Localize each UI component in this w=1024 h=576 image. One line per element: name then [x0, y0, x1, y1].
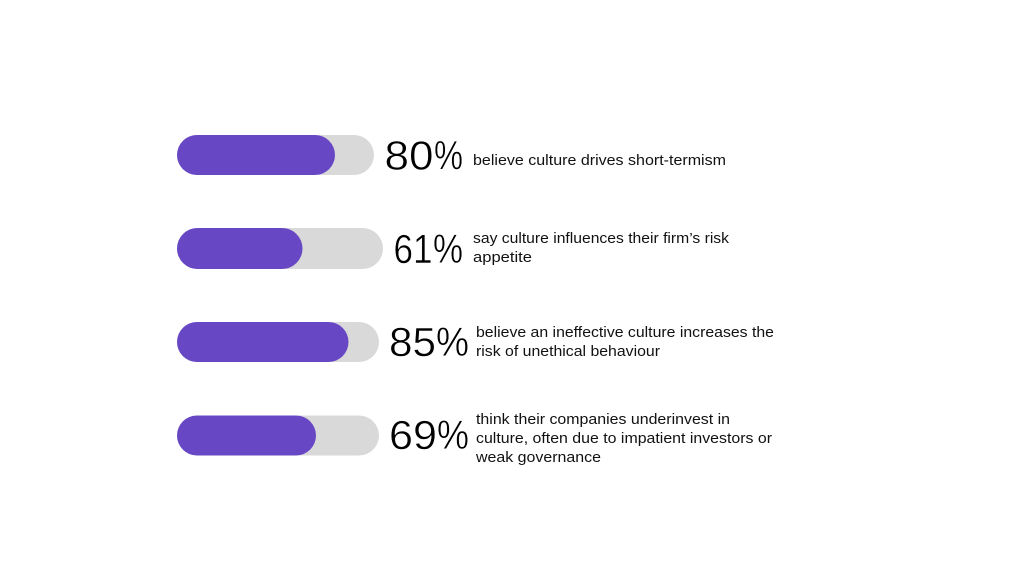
row: 61% risk appetite: [177, 226, 730, 272]
description: underinvestment: weak governance: [475, 449, 601, 466]
row: 69% underinvestment: [177, 411, 772, 466]
description: unethical behaviour: risk of unethical behaviour: [476, 343, 660, 360]
description: underinvestment: [475, 411, 772, 466]
stat: 61%: %: [433, 226, 463, 272]
description: underinvestment: culture, often due to impatient investors or: [476, 430, 772, 447]
stat: 69%: %: [437, 412, 469, 458]
stat: 85%: %: [436, 319, 469, 365]
row: 85% unethical behaviour: [177, 319, 774, 365]
progress bar: 69%: [177, 416, 379, 456]
description: risk appetite: appetite: [473, 249, 532, 266]
description: unethical behaviour: [476, 324, 774, 360]
stat: 80%: %: [434, 132, 463, 178]
stat: 61%: 61: [394, 226, 432, 272]
description: risk appetite: [473, 230, 730, 266]
stat: 80%: 80: [384, 132, 434, 178]
stat: 85%: 85: [389, 319, 436, 365]
description: short-termism: believe culture drives short-termism: [473, 152, 726, 169]
progress bar: 61%: [177, 228, 383, 269]
progress bar: 85%: [177, 322, 379, 362]
description: unethical behaviour: believe an ineffective culture increases the: [476, 324, 774, 341]
description: risk appetite: say culture influences their firm’s risk: [473, 230, 730, 247]
stat: 69%: 69: [389, 412, 437, 458]
progress bar: 80%: [177, 135, 374, 175]
description: underinvestment: think their companies underinvest in: [476, 411, 730, 428]
row: 80% short-termism: [177, 132, 726, 178]
